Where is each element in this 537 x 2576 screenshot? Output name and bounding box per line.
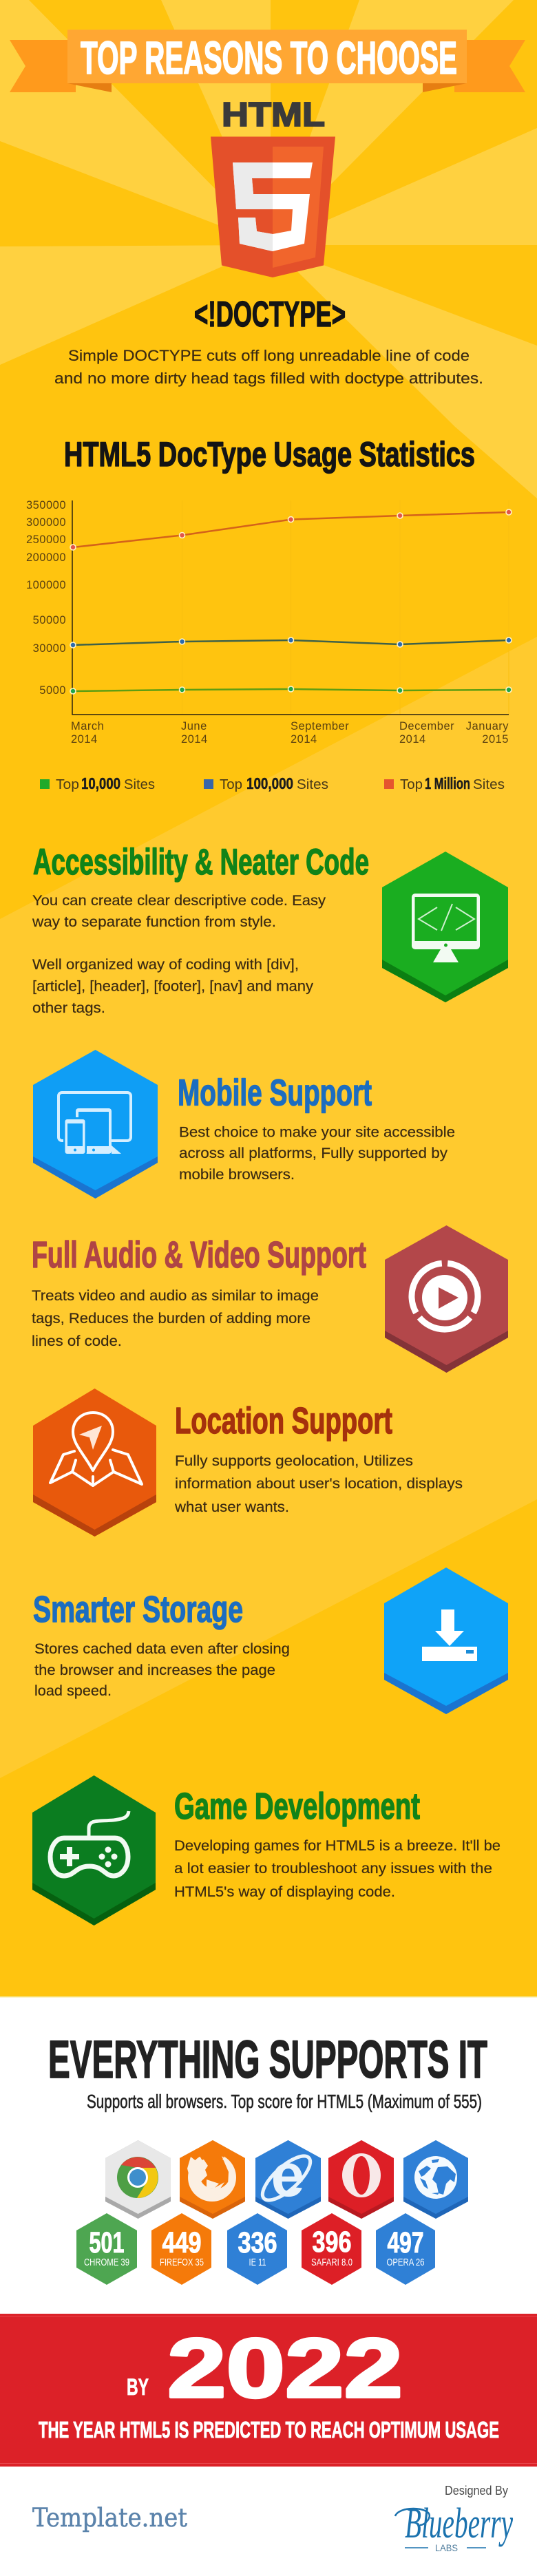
- x axis labels: 2015: [482, 733, 509, 746]
- body text: Treats video and audio as similar to image: [32, 1287, 319, 1304]
- ribbon banner with title: [10, 30, 525, 92]
- icon: map pin: [33, 1389, 156, 1537]
- yellow background with sunburst: [0, 0, 537, 1998]
- score: opera: 497: [387, 2226, 424, 2259]
- browser scores row: [76, 2213, 435, 2285]
- score: ie: 336: [238, 2226, 277, 2259]
- y axis labels: 200000: [26, 551, 66, 564]
- body text: way to separate function from style.: [32, 914, 276, 930]
- y axis labels: 100000: [26, 579, 66, 591]
- score: safari: SAFARI 8.0: [311, 2257, 352, 2268]
- section: accessibility: [32, 842, 508, 1016]
- body text: a lot easier to troubleshoot any issues with the: [174, 1860, 492, 1877]
- section: game development: [32, 1775, 501, 1925]
- icon: play button: [385, 1225, 508, 1373]
- x axis labels: 2014: [291, 733, 317, 746]
- footer template.net logo: Template.net: [32, 2503, 187, 2533]
- line: top 10,000 sites: [70, 686, 512, 694]
- score: safari: 396: [313, 2226, 351, 2259]
- red prediction band: [0, 2314, 537, 2467]
- body text: [179, 1123, 455, 1183]
- body text: Fully supports geolocation, Utilizes: [175, 1453, 413, 1469]
- shield: [211, 136, 335, 277]
- score: ie: [227, 2213, 287, 2285]
- section: smarter storage: [33, 1567, 508, 1714]
- chart legend: 100,000: [246, 774, 293, 792]
- score: firefox: 449: [162, 2226, 201, 2259]
- score: opera: [376, 2213, 435, 2285]
- chart legend: Sites: [297, 777, 328, 792]
- by label: BY: [127, 2374, 149, 2400]
- body text: Best choice to make your site accessible: [179, 1123, 455, 1140]
- icon: internet explorer: e: [271, 2141, 304, 2209]
- score: safari: [302, 2213, 361, 2285]
- body text: HTML5's way of displaying code.: [174, 1883, 395, 1900]
- score: firefox: [151, 2213, 211, 2285]
- body text: what user wants.: [174, 1499, 289, 1515]
- x axis labels: December: [399, 720, 454, 732]
- chart legend: [40, 774, 505, 792]
- body text: the browser and increases the page: [34, 1662, 275, 1678]
- y axis labels: 300000: [26, 516, 66, 529]
- x axis labels: June: [181, 720, 207, 732]
- heading: Smarter Storage: [33, 1589, 243, 1630]
- doctype description: and no more dirty head tags filled with doctype attributes.: [54, 370, 483, 387]
- heading: Full Audio & Video Support: [32, 1234, 366, 1276]
- body text: load speed.: [34, 1682, 112, 1699]
- year: 2022: [167, 2321, 403, 2415]
- y axis labels: 30000: [33, 642, 66, 655]
- body text: [article], [header], [footer], [nav] and many: [32, 978, 313, 994]
- x axis labels: [71, 720, 509, 746]
- icon: chrome: [105, 2140, 171, 2219]
- y axis labels: 350000: [26, 499, 66, 511]
- y axis labels: 5000: [39, 684, 66, 697]
- x axis labels: September: [291, 720, 349, 732]
- body text: mobile browsers.: [179, 1166, 295, 1183]
- designed by: Designed By: [445, 2484, 508, 2498]
- score: firefox: FIREFOX 35: [160, 2257, 204, 2268]
- icon: firefox: [180, 2140, 245, 2219]
- doctype heading: <!DOCTYPE>: [194, 295, 346, 335]
- x axis labels: 2014: [71, 733, 98, 746]
- body text: [174, 1837, 501, 1900]
- body text: across all platforms, Fully supported by: [179, 1145, 448, 1161]
- doctype description: Simple DOCTYPE cuts off long unreadable line of code: [68, 347, 470, 364]
- score: chrome: CHROME 39: [84, 2257, 129, 2268]
- heading: Game Development: [174, 1786, 420, 1827]
- browser icons row: [105, 2140, 468, 2219]
- heading: Mobile Support: [178, 1073, 372, 1114]
- body text: lines of code.: [32, 1333, 122, 1349]
- section: mobile support: [33, 1050, 455, 1199]
- x axis labels: 2014: [399, 733, 426, 746]
- icon: opera: [328, 2140, 394, 2219]
- chart legend: 10,000: [81, 774, 120, 792]
- labs: [405, 2542, 486, 2553]
- icon: devices: [33, 1050, 158, 1199]
- chart legend: Sites: [124, 777, 155, 792]
- heading: Location Support: [175, 1400, 392, 1442]
- body text: Developing games for HTML5 is a breeze. It'll be: [174, 1837, 501, 1854]
- line: top 100,000 sites: [70, 637, 512, 648]
- icon: game controller: [32, 1775, 156, 1925]
- chart legend: Sites: [473, 777, 505, 792]
- icon: monitor with code: [382, 852, 508, 1002]
- body text: [174, 1453, 463, 1515]
- score: chrome: [76, 2213, 137, 2285]
- icon: globe: [403, 2140, 468, 2219]
- footer designer credit: [395, 2484, 513, 2553]
- y axis labels: 50000: [33, 614, 66, 626]
- chart legend: 1 Million: [425, 774, 470, 792]
- section: audio and video: [32, 1225, 508, 1373]
- x axis labels: 2014: [181, 733, 208, 746]
- body text: [32, 892, 326, 1016]
- body text: other tags.: [32, 1000, 105, 1016]
- line chart: [26, 499, 512, 746]
- icon: internet explorer: [255, 2140, 321, 2219]
- body text: tags, Reduces the burden of adding more: [32, 1310, 310, 1327]
- y axis labels: [26, 499, 66, 697]
- body text: information about user's location, displays: [175, 1475, 463, 1492]
- y axis labels: 250000: [26, 534, 66, 546]
- labs: LABS: [435, 2542, 458, 2553]
- chart legend: Top: [220, 777, 242, 792]
- body text: Stores cached data even after closing: [34, 1640, 290, 1657]
- icon: download: [384, 1567, 508, 1714]
- heading: Accessibility & Neater Code: [33, 842, 369, 883]
- HTML wordmark: HTML: [222, 96, 325, 134]
- x axis labels: January: [466, 720, 509, 732]
- section: location support: [33, 1389, 463, 1537]
- body text: [32, 1287, 319, 1349]
- score: chrome: 501: [90, 2226, 124, 2259]
- body text: Well organized way of coding with [div],: [32, 956, 299, 973]
- doctype description: [54, 347, 483, 387]
- body text: [34, 1640, 290, 1699]
- line: top 1 million sites: [70, 509, 512, 550]
- x axis labels: March: [71, 720, 104, 732]
- HTML5 logo: [211, 96, 335, 277]
- chart legend: Top: [400, 777, 423, 792]
- score: ie: IE 11: [249, 2257, 266, 2268]
- chart legend: Top: [56, 777, 79, 792]
- body text: You can create clear descriptive code. Easy: [32, 892, 326, 909]
- score: opera: OPERA 26: [387, 2257, 424, 2268]
